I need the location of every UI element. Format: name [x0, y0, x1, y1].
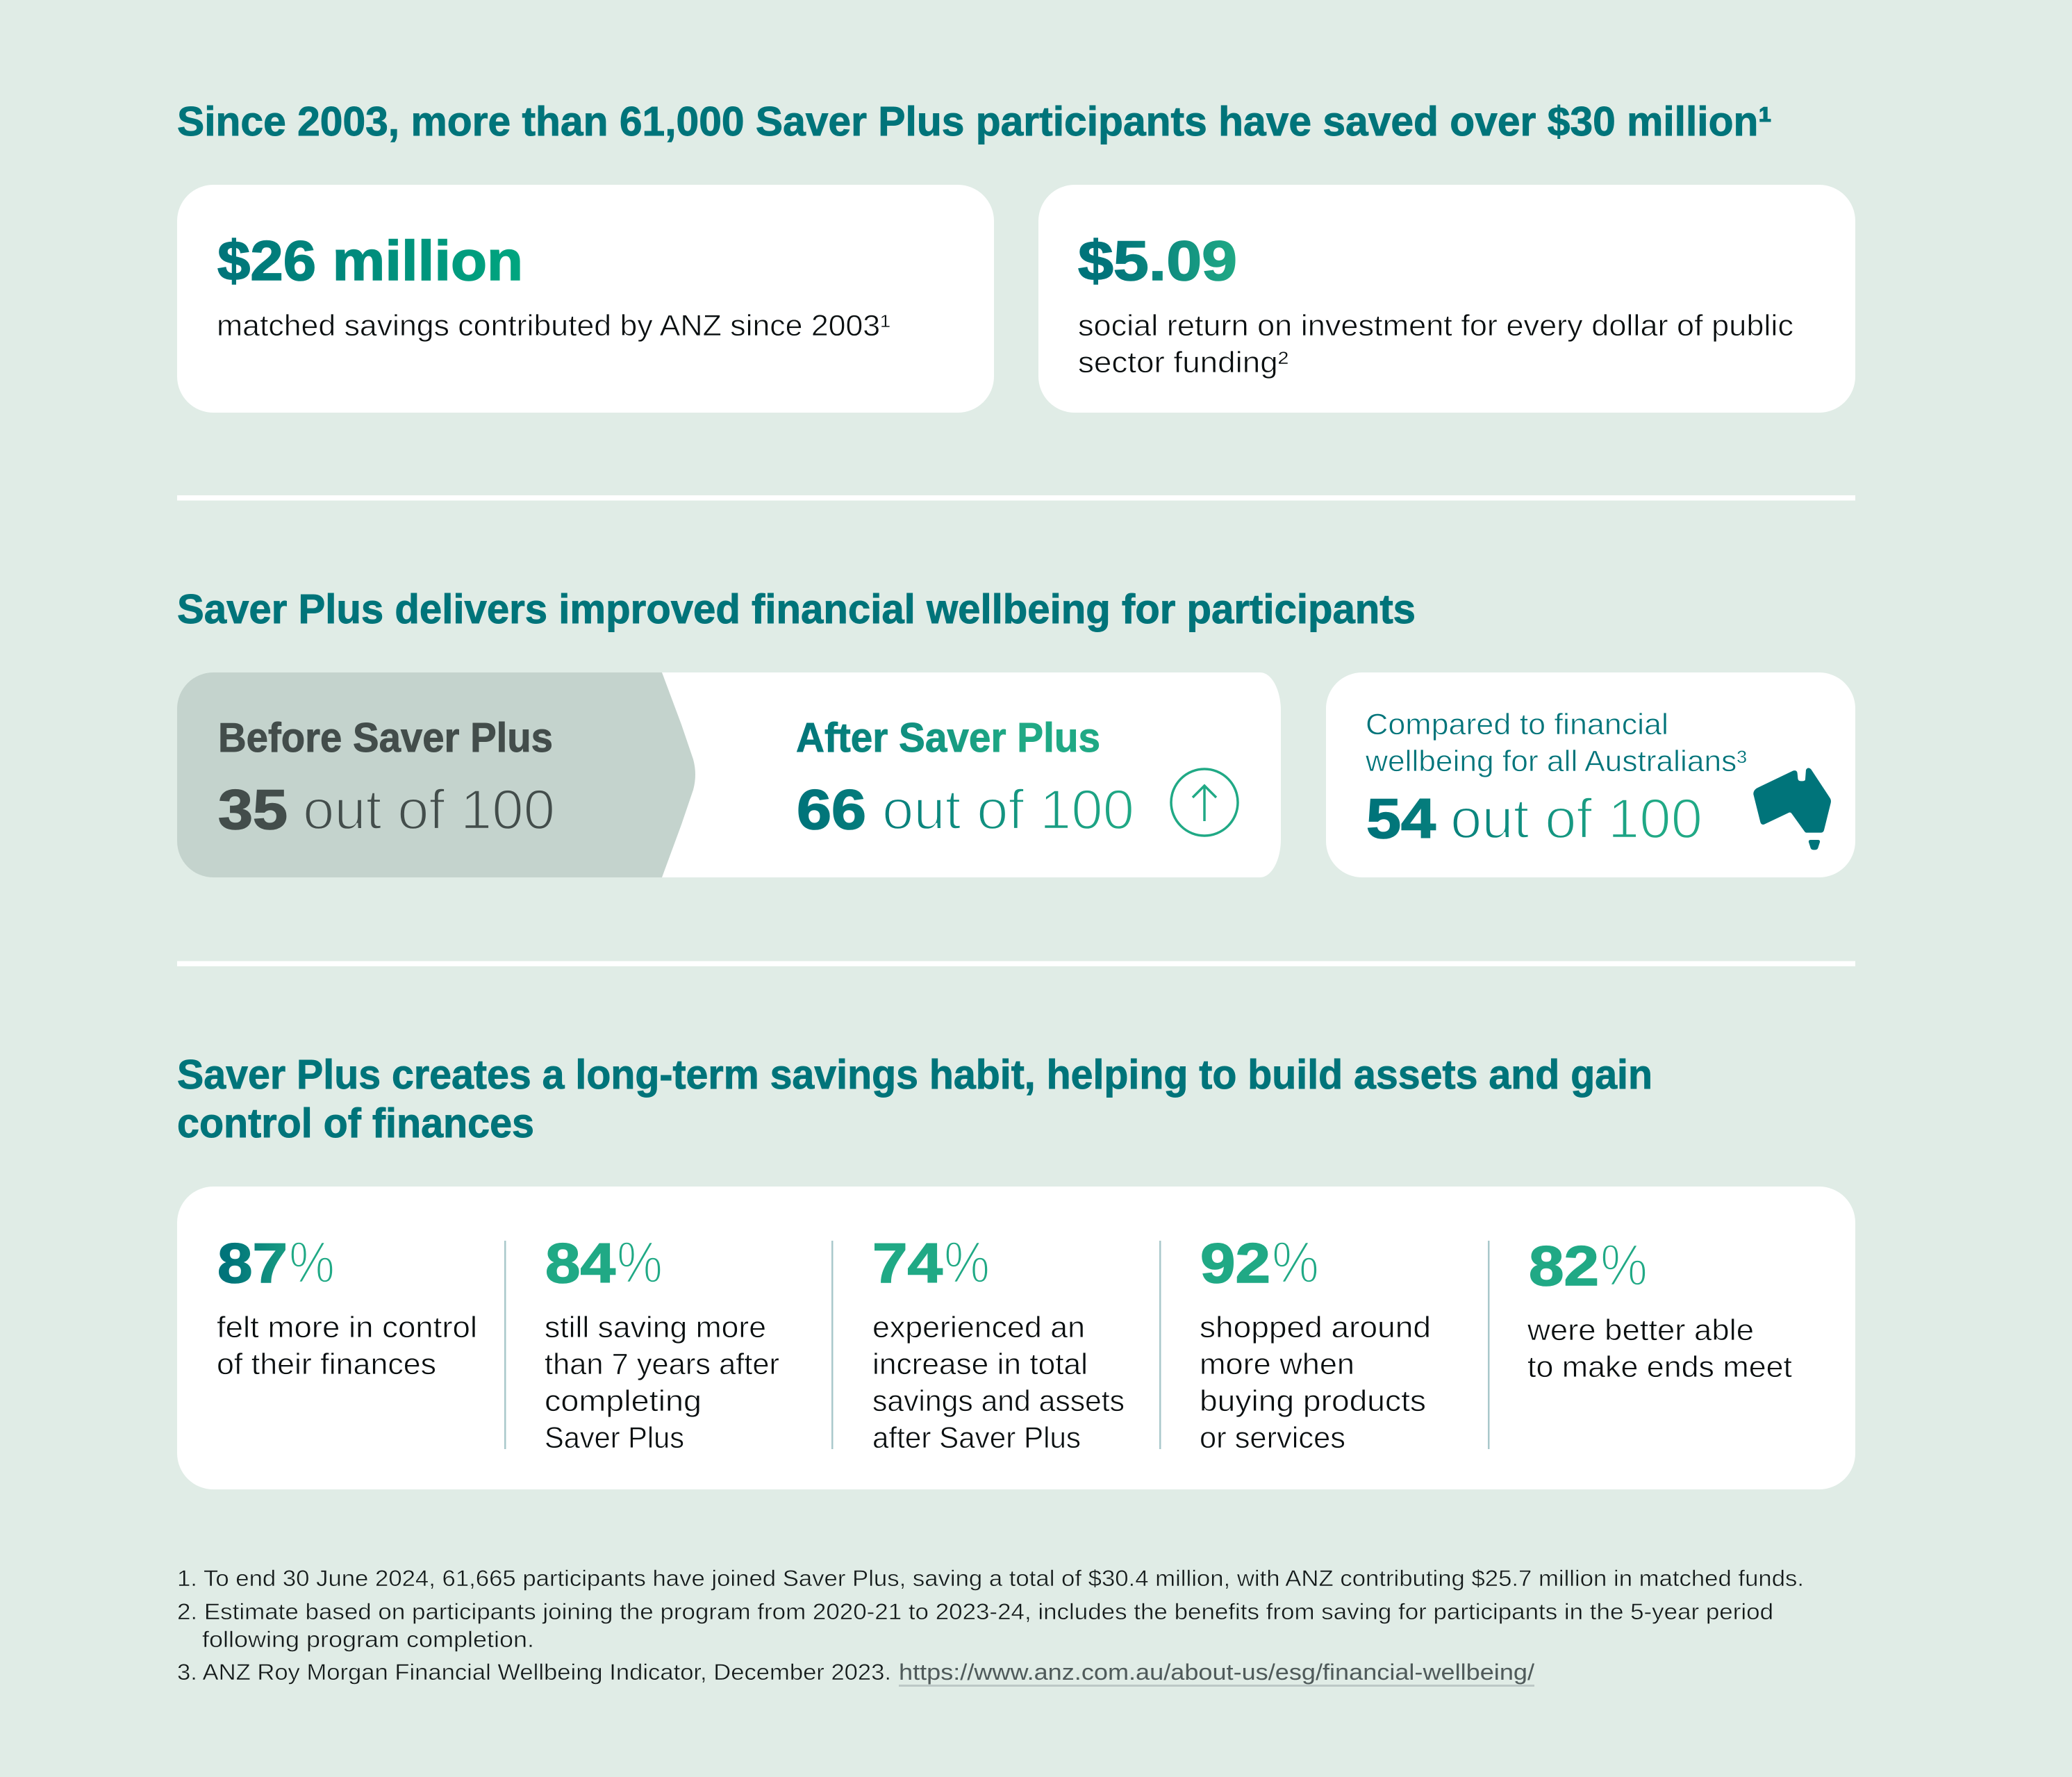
icon: up arrow in circle — [1171, 769, 1238, 836]
stat: 92 percent: more when — [1200, 1348, 1354, 1381]
stat: 82 percent — [1527, 1232, 1792, 1384]
stat: 66 out of 100: 66 — [797, 779, 866, 841]
stat: 84 percent — [545, 1230, 779, 1455]
text: comparison label — [1365, 708, 1747, 778]
stat: $5.09: $5.09 — [1078, 230, 1237, 292]
stat: 82 percent: % — [1600, 1232, 1648, 1298]
stat: 84 percent: completing — [545, 1385, 702, 1418]
stat: 92 percent — [1200, 1230, 1431, 1455]
panel: $26 million matched savings — [177, 185, 994, 413]
stat: 92 percent: 92 — [1200, 1232, 1270, 1295]
stat: 87 percent: % — [289, 1230, 335, 1295]
icon: map of Australia — [1753, 768, 1831, 850]
stat: 84 percent: Saver Plus — [545, 1421, 684, 1455]
stat: 82 percent: were better able — [1527, 1314, 1754, 1347]
stat: 84 percent: % — [617, 1230, 663, 1295]
stat: 74 percent: after Saver Plus — [872, 1421, 1081, 1455]
text: before label: Before Saver Plus — [218, 715, 553, 761]
stat: 35 out of 100: out of 100 — [303, 779, 555, 841]
panel: outcome statistics — [177, 1187, 1855, 1489]
stat: 74 percent: savings and assets — [872, 1385, 1125, 1418]
stat: 82 percent: 82 — [1529, 1235, 1599, 1298]
text: comparison label: Compared to financial — [1366, 708, 1668, 741]
heading: long-term savings habit — [177, 1052, 1652, 1146]
heading: savings since 2003: Since 2003, more than 61,000 Saver Plus participants have saved over $30 million¹ — [177, 99, 1772, 144]
stat: 66 out of 100: out of 100 — [882, 779, 1134, 841]
footnotes: 3. ANZ Roy Morgan Financial Wellbeing Indicator, December 2023. — [177, 1660, 891, 1685]
link: financial wellbeing URL: https://www.anz.com.au/about-us/esg/financial-wellbeing/ — [899, 1660, 1534, 1685]
heading: financial wellbeing: Saver Plus delivers improved financial wellbeing for participants — [177, 586, 1416, 632]
stat: 82 percent: to make ends meet — [1527, 1350, 1792, 1384]
heading: long-term savings habit: Saver Plus creates a long-term savings habit, helping to build assets and gain — [177, 1052, 1652, 1098]
stat: 84 percent: 84 — [545, 1232, 615, 1295]
stat: 87 percent: of their finances — [217, 1348, 436, 1381]
stat: 92 percent: shopped around — [1200, 1311, 1431, 1344]
stat: 92 percent: buying products — [1200, 1385, 1426, 1418]
panel: before and after comparison — [177, 672, 1281, 877]
stat: $26 million: $26 million — [217, 230, 523, 292]
stat: 74 percent: % — [944, 1230, 990, 1295]
stat: 54 out of 100: 54 — [1366, 788, 1436, 850]
stat: 74 percent — [872, 1230, 1125, 1455]
panel: compared to all Australians — [1326, 672, 1855, 877]
stat: 87 percent: felt more in control — [217, 1311, 477, 1344]
text: comparison label: wellbeing for all Australians³ — [1365, 745, 1747, 778]
after card background — [625, 672, 1281, 877]
stat: 54 out of 100: out of 100 — [1450, 788, 1702, 850]
stat: 84 percent: still saving more — [545, 1311, 766, 1344]
stat: 92 percent: % — [1272, 1230, 1319, 1295]
heading: long-term savings habit: control of finances — [177, 1100, 534, 1146]
footnotes: following program completion. — [202, 1627, 534, 1652]
stat: 74 percent: increase in total — [872, 1348, 1088, 1381]
text: social return description — [1078, 309, 1793, 379]
footnotes: 1. To end 30 June 2024, 61,665 participants have joined Saver Plus, saving a total of $30.4 million, with ANZ contributing $25.7 million in matched funds. — [177, 1566, 1804, 1591]
stat: 92 percent: or services — [1200, 1421, 1345, 1455]
text: social return description: social return on investment for every dollar of public — [1078, 309, 1793, 342]
text: matched savings description: matched savings contributed by ANZ since 2003¹ — [217, 309, 890, 342]
stat: 84 percent: than 7 years after — [545, 1348, 779, 1381]
stat: 35 out of 100: 35 — [218, 779, 288, 841]
footnotes — [177, 1566, 1804, 1687]
stat: 74 percent: experienced an — [872, 1311, 1085, 1344]
stat: 87 percent: 87 — [217, 1232, 288, 1295]
footnotes: 2. Estimate based on participants joining the program from 2020-21 to 2023-24, includes the benefits from saving for participants in the 5-year period — [177, 1599, 1773, 1624]
before arrow shape — [177, 672, 695, 877]
panel: $5.09 social return — [1038, 185, 1855, 413]
text: after label: After Saver Plus — [796, 715, 1100, 761]
text: social return description: sector funding² — [1078, 346, 1288, 379]
stat: 74 percent: 74 — [872, 1232, 943, 1295]
stat: 87 percent — [217, 1230, 477, 1381]
